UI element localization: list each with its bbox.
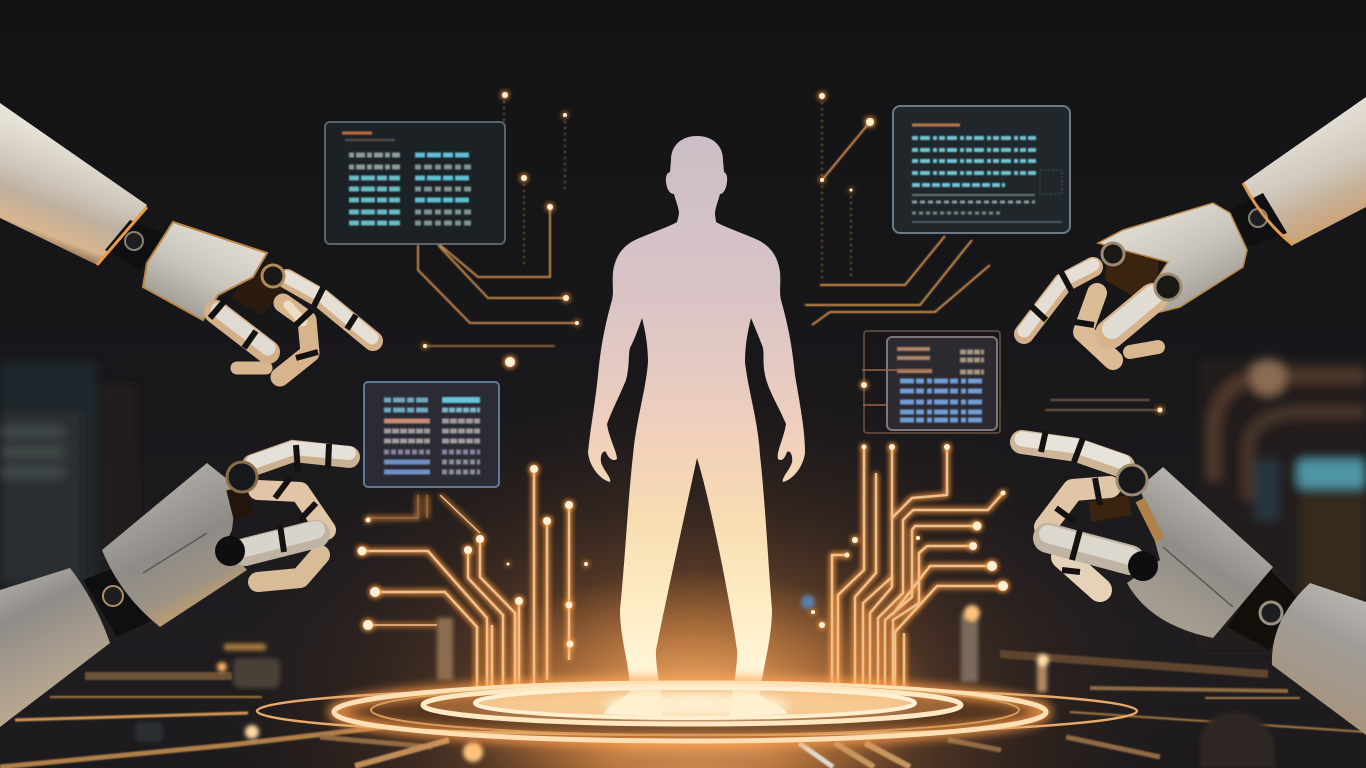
human silhouette bbox=[588, 136, 805, 716]
wrist joint bbox=[83, 560, 153, 637]
platform interior glow bbox=[338, 685, 1042, 739]
panel: data screen middle left bbox=[364, 382, 499, 487]
palm bbox=[1098, 203, 1247, 312]
background machinery right bbox=[1200, 359, 1366, 650]
glowing node dots bbox=[358, 92, 1162, 648]
wrist joint bbox=[1227, 567, 1297, 650]
knuckles bbox=[1102, 243, 1181, 300]
knuckles bbox=[215, 462, 257, 566]
forearm cylinder bbox=[0, 103, 147, 265]
wrist joint bbox=[97, 207, 163, 270]
floor reflection bbox=[625, 740, 765, 768]
panel: data screen middle right bbox=[862, 331, 1000, 433]
forearm cylinder bbox=[1272, 583, 1366, 735]
circuit traces lower left bbox=[362, 469, 569, 692]
forearm cylinder bbox=[0, 568, 110, 727]
palm bbox=[102, 463, 247, 627]
robot arm bottom left bbox=[0, 444, 349, 727]
panel: data screen top right bbox=[893, 106, 1070, 233]
wrist joint bbox=[1230, 183, 1293, 247]
circuit traces upper right bbox=[805, 96, 1160, 410]
glowing ring platform bbox=[257, 683, 1137, 741]
circuit traces lower right bbox=[832, 447, 1003, 692]
fingers bbox=[1024, 265, 1158, 360]
knuckle bbox=[262, 265, 284, 287]
circuit traces upper left bbox=[418, 95, 577, 346]
palm bbox=[1127, 467, 1273, 638]
blue bokeh dot bbox=[801, 595, 815, 609]
robot arm bottom right bbox=[1022, 430, 1366, 735]
fingers bbox=[230, 444, 349, 582]
floor bands bbox=[0, 654, 1366, 767]
dark finger block bbox=[232, 262, 292, 315]
robot arm top right bbox=[1024, 97, 1366, 360]
fingers bbox=[210, 277, 373, 377]
background machinery left bbox=[0, 362, 136, 587]
floor objects bbox=[135, 605, 1275, 768]
fingers bbox=[1022, 430, 1160, 590]
forearm cylinder bbox=[1243, 97, 1366, 245]
dark finger block bbox=[1105, 248, 1160, 296]
panel: data screen top left bbox=[325, 122, 505, 244]
palm bbox=[143, 222, 267, 320]
knuckles bbox=[1117, 465, 1158, 581]
robot arm top left bbox=[0, 103, 373, 377]
